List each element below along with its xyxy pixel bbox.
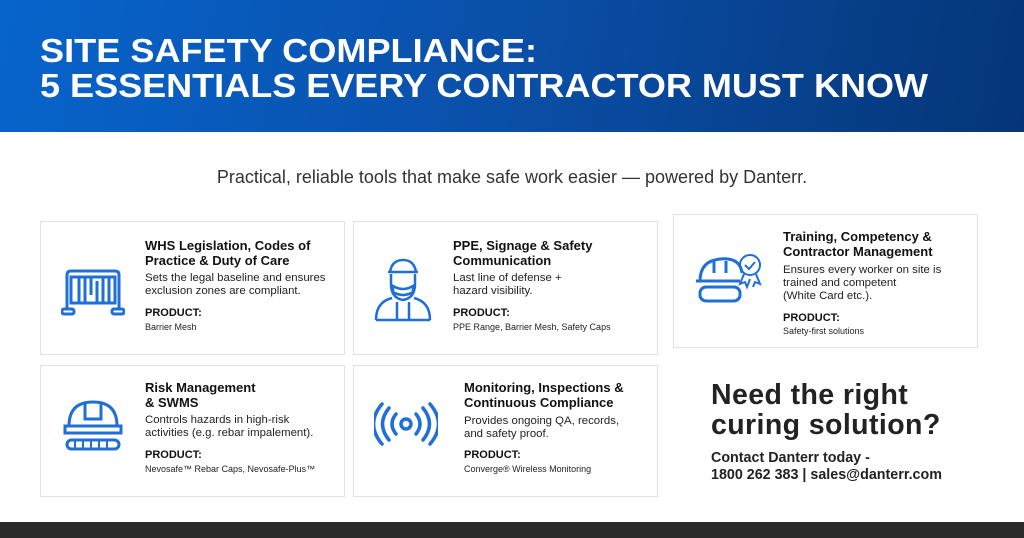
panel: training <box>673 214 978 348</box>
panel: training: trained and competent <box>783 277 896 289</box>
callout: contact: Need the right <box>711 379 908 411</box>
callout: contact: 1800 262 383 | sales@danterr.com <box>711 467 942 483</box>
panel: monitoring: and safety proof. <box>464 428 549 440</box>
title <box>40 32 929 104</box>
icon: wireless signal <box>374 402 438 446</box>
panel: risk management: Controls hazards in high-risk <box>145 414 289 426</box>
header banner <box>0 0 1024 132</box>
footer bar <box>0 522 1024 538</box>
panel: risk management: PRODUCT: <box>145 449 202 461</box>
panel: training: Ensures every worker on site is <box>783 264 941 276</box>
panel: monitoring: Continuous Compliance <box>464 395 614 410</box>
panel: monitoring: PRODUCT: <box>464 449 521 461</box>
callout: contact <box>711 379 942 483</box>
icon: hard hat <box>64 400 122 450</box>
title: 5 ESSENTIALS EVERY CONTRACTOR MUST KNOW <box>40 67 929 104</box>
panel: risk management: Nevosafe™ Rebar Caps, Nevosafe-Plus™ <box>145 464 315 474</box>
panel: WHS legislation: Barrier Mesh <box>145 322 197 332</box>
panel: training: Contractor Management <box>783 244 933 259</box>
callout: contact: Contact Danterr today - <box>711 450 870 466</box>
panel: PPE: Last line of defense + <box>453 272 562 284</box>
icon: helmet goggles badge <box>696 254 762 302</box>
subtitle: Practical, reliable tools that make safe work easier — powered by Danterr. <box>217 167 807 187</box>
icon: barrier <box>61 270 125 316</box>
panel: training: Safety-first solutions <box>783 326 864 336</box>
panel: monitoring: Converge® Wireless Monitoring <box>464 464 591 474</box>
panel: monitoring <box>353 365 658 497</box>
panel: WHS legislation <box>40 221 345 355</box>
callout: contact: curing solution? <box>711 409 941 441</box>
panel: risk management: & SWMS <box>145 395 198 410</box>
panel: PPE: PRODUCT: <box>453 307 510 319</box>
panel: risk management <box>40 365 345 497</box>
panel: PPE: Communication <box>453 253 551 268</box>
panel: training: (White Card etc.). <box>783 290 872 302</box>
panel: risk management: activities (e.g. rebar impalement). <box>145 427 313 439</box>
panel: PPE: hazard visibility. <box>453 285 533 297</box>
panel: PPE: PPE Range, Barrier Mesh, Safety Caps <box>453 322 611 332</box>
title: SITE SAFETY COMPLIANCE: <box>40 32 537 69</box>
panel: risk management: Risk Management <box>145 380 256 395</box>
panel: training: Training, Competency & <box>783 229 932 244</box>
panel: training: PRODUCT: <box>783 312 840 324</box>
panel: WHS legislation: Practice & Duty of Care <box>145 253 290 268</box>
panel: WHS legislation: PRODUCT: <box>145 307 202 319</box>
panel: PPE <box>353 221 658 355</box>
panel: monitoring: Provides ongoing QA, records, <box>464 415 619 427</box>
icon: worker with mask <box>374 258 432 322</box>
panel: WHS legislation: WHS Legislation, Codes of <box>145 238 310 253</box>
panel: monitoring: Monitoring, Inspections & <box>464 380 624 395</box>
panel: WHS legislation: exclusion zones are compliant. <box>145 285 301 297</box>
panel: WHS legislation: Sets the legal baseline and ensures <box>145 272 325 284</box>
panel: PPE: PPE, Signage & Safety <box>453 238 592 253</box>
